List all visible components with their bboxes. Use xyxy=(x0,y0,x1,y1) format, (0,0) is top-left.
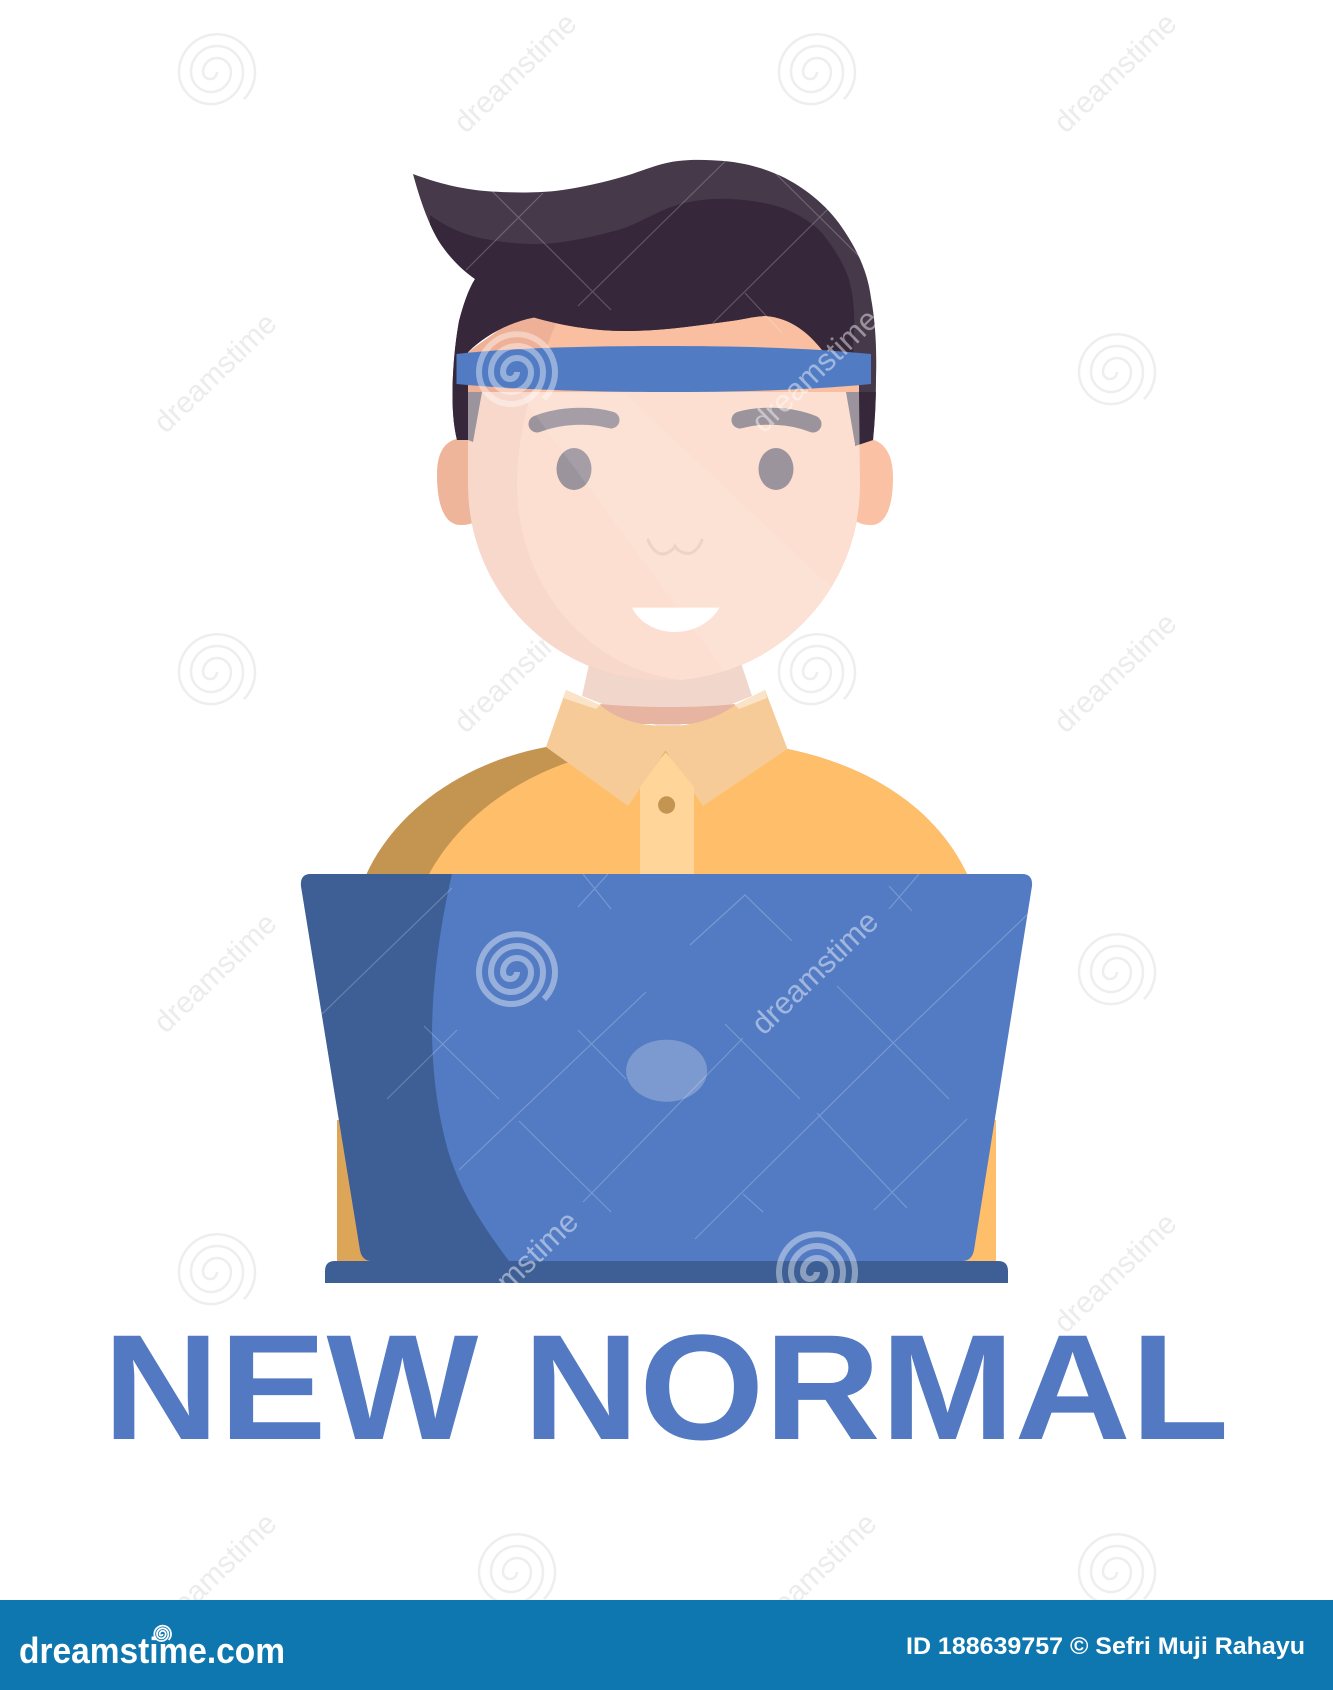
faint watermark pattern on white: dreamstime xyxy=(148,907,283,1039)
title: NEW NORMAL xyxy=(103,1303,1229,1471)
faint watermark pattern on white: dreamstime xyxy=(148,1507,283,1639)
watermark spirals xyxy=(479,334,855,1304)
shirt placket with button xyxy=(640,752,694,876)
footer credit: ID 188639757 © Sefri Muji Rahayu xyxy=(906,1633,1305,1660)
watermark words: dreamstime xyxy=(744,302,885,439)
right eye xyxy=(758,448,794,490)
faint watermark pattern on white: dreamstime xyxy=(1048,7,1183,139)
faint watermark pattern on white xyxy=(148,7,1183,1639)
right ear xyxy=(852,438,893,525)
laptop lid xyxy=(301,874,1032,1261)
hair xyxy=(400,150,890,450)
head xyxy=(468,305,860,681)
watermark thin lines xyxy=(322,161,1029,1239)
person figure xyxy=(337,150,996,1261)
shirt collar xyxy=(546,690,788,806)
face light area xyxy=(532,316,860,665)
right eyebrow xyxy=(740,416,813,424)
laptop lid shaded side xyxy=(301,874,509,1261)
faint watermark pattern on white: dreamstime xyxy=(748,1507,883,1639)
lower torso behind laptop xyxy=(337,1120,996,1261)
left ear xyxy=(437,438,478,525)
laptop xyxy=(301,874,1032,1283)
headband xyxy=(456,346,871,392)
face shield xyxy=(460,390,870,685)
left eyebrow xyxy=(537,416,611,424)
shirt shoulders xyxy=(366,747,968,876)
watermarks over artwork xyxy=(322,161,1029,1341)
laptop base xyxy=(325,1261,1008,1283)
faint watermark pattern on white: dreamstime xyxy=(148,307,283,439)
footer bar xyxy=(0,1600,1333,1690)
faint watermark pattern on white: dreamstime xyxy=(448,607,583,739)
laptop logo xyxy=(626,1040,707,1102)
faint watermark pattern on white: dreamstime xyxy=(448,7,583,139)
watermark words: dreamstime xyxy=(744,904,885,1041)
left eye xyxy=(556,448,592,490)
hair side strips under shield xyxy=(468,392,859,444)
neck xyxy=(582,660,752,730)
nose xyxy=(648,540,702,554)
faint watermark pattern on white: dreamstime xyxy=(1048,607,1183,739)
mouth xyxy=(632,608,720,632)
faint watermark pattern on white: dreamstime xyxy=(1048,1207,1183,1339)
watermark words xyxy=(444,302,885,1341)
watermark words: dreamstime xyxy=(444,1204,585,1341)
footer logo: dreamstime.com xyxy=(19,1630,285,1671)
